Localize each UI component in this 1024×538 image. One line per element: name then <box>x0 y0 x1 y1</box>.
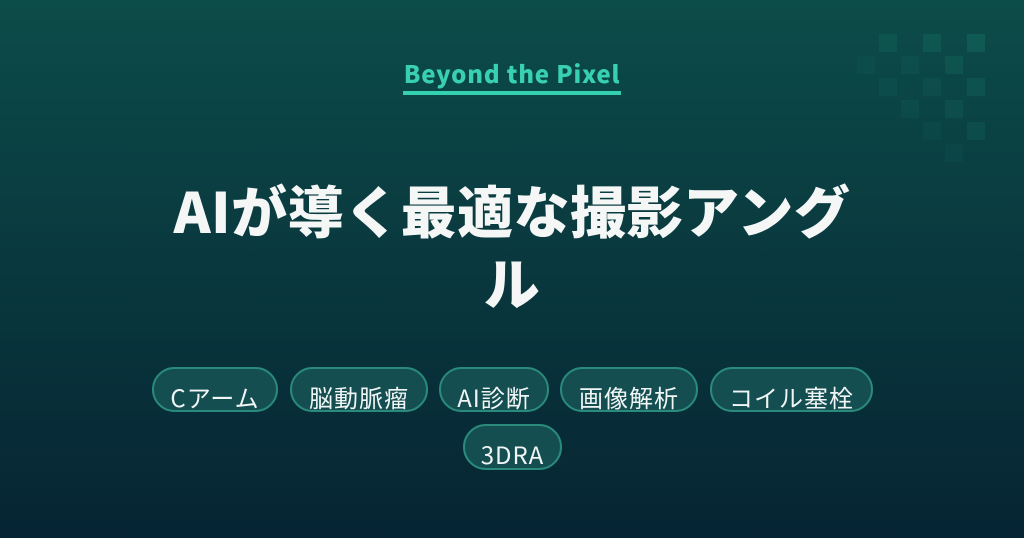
tag: AI診断 <box>439 367 549 412</box>
tag: 脳動脈瘤 <box>290 367 428 412</box>
decorative pixel grid icon <box>879 34 985 140</box>
title: AIが導く最適な撮影アング <box>174 169 850 250</box>
title <box>173 169 850 322</box>
tag: コイル塞栓 <box>710 367 873 412</box>
tag: 画像解析 <box>560 367 698 412</box>
tag: 3DRA: 3DRA <box>481 436 544 470</box>
title: ル <box>484 241 540 322</box>
tag: 3DRA <box>463 424 562 470</box>
tag: Cアーム <box>152 367 278 412</box>
eyebrow: Beyond the Pixel: Beyond the Pixel <box>404 55 620 90</box>
